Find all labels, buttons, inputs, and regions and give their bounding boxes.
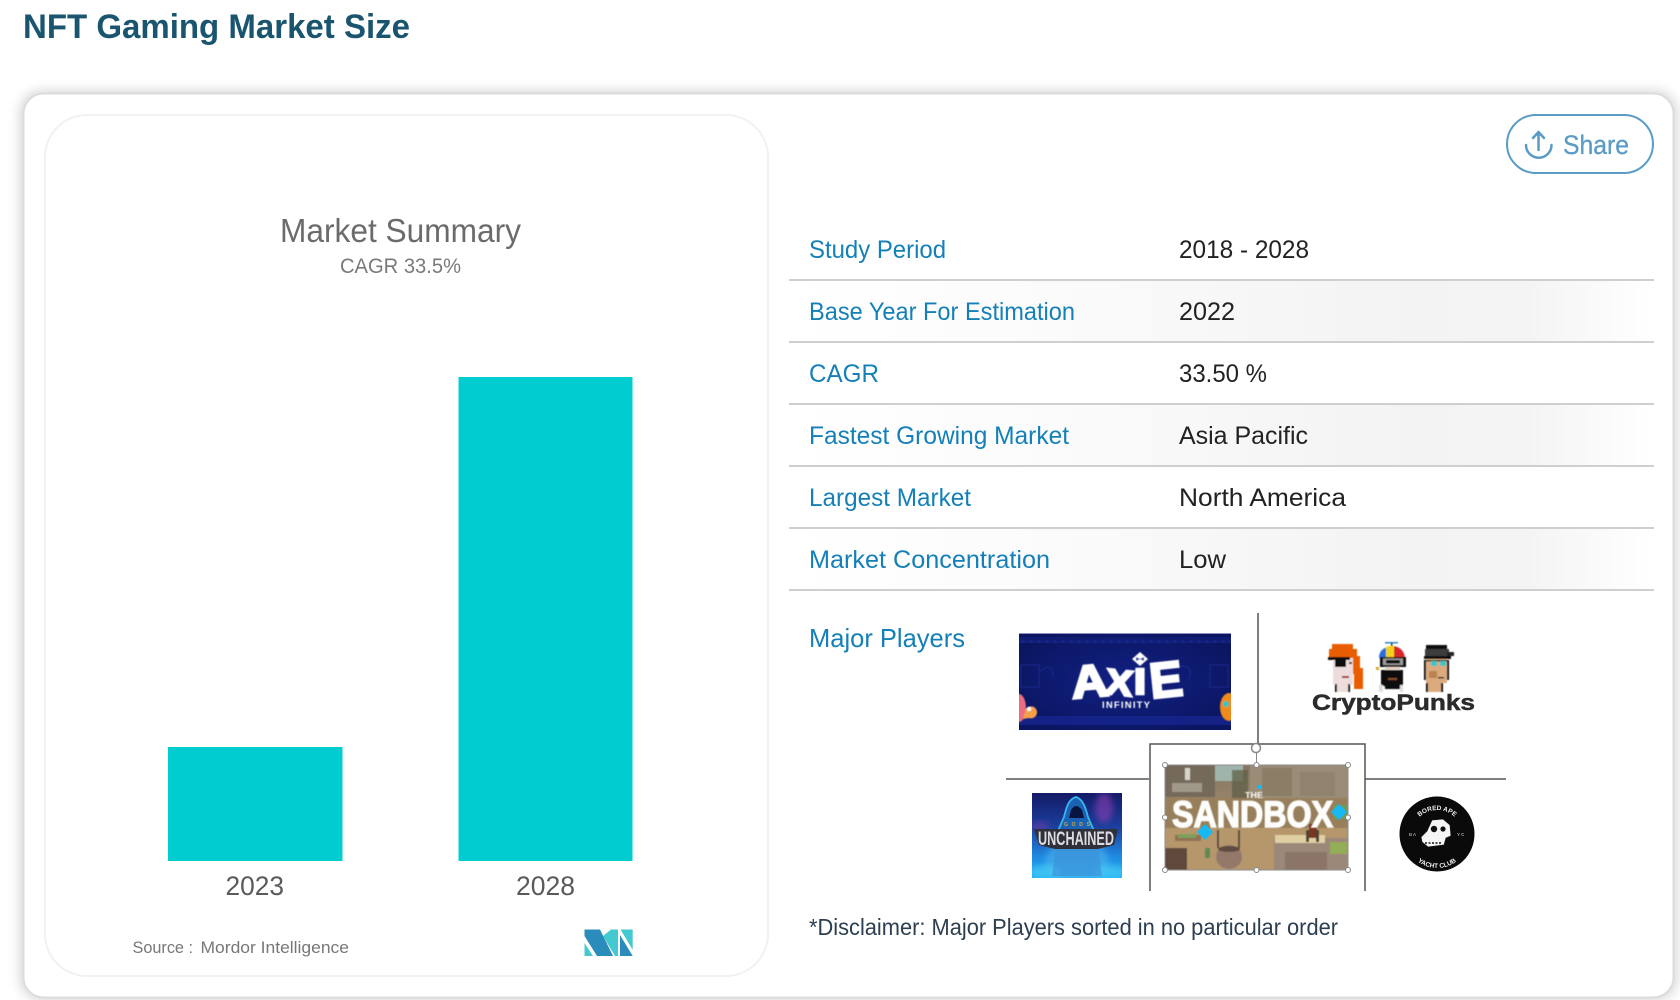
bar chart (168, 377, 632, 901)
row: CAGR (809, 360, 1267, 388)
text: sandbox wordmark: THE (1245, 790, 1263, 800)
row: market concentration: Market Concentration (809, 546, 1050, 574)
text: sandbox wordmark: SANDBOX (1172, 794, 1333, 835)
logo: the sandbox (1162, 744, 1350, 872)
label: share: Share (1563, 130, 1629, 160)
row: CAGR: CAGR (809, 360, 879, 388)
row: base year: 2022 (1179, 298, 1235, 326)
row: market concentration (809, 546, 1227, 574)
text: unchained wordmark: UNCHAINED (1038, 829, 1114, 850)
logo: gods unchained: GODS (1064, 822, 1091, 828)
punk: teal glasses (1424, 645, 1454, 692)
row: largest market: North America (1179, 484, 1346, 512)
logo: axie infinity (1012, 633, 1238, 730)
row: fastest growing market (809, 422, 1308, 450)
text: cryptopunks wordmark: CryptoPunks (1312, 690, 1475, 715)
heading: major players: Major Players (809, 623, 965, 653)
punk: orange hair (1328, 644, 1363, 692)
punk: propeller cap (1376, 642, 1406, 692)
label: 2023: 2023 (226, 871, 284, 901)
text: source: Source : (132, 938, 193, 957)
row: base year (809, 298, 1235, 326)
text: CAGR: CAGR 33.5% (340, 255, 461, 278)
row: study period (809, 236, 1309, 264)
bar: 2023 (168, 747, 342, 861)
major players grid (1006, 613, 1506, 891)
logo: bored ape yacht club: YACHT CLUB (1419, 858, 1456, 868)
row: largest market (809, 484, 1346, 512)
logo: bored ape yacht club (1400, 796, 1474, 872)
row: study period: Study Period (809, 236, 946, 264)
logo: bored ape yacht club: B A (1409, 832, 1416, 837)
bar: 2028 (458, 377, 632, 861)
row: market concentration: Low (1179, 546, 1227, 574)
icon: share arrow (1526, 132, 1552, 158)
logo: bored ape yacht club: BORED APE (1417, 806, 1458, 817)
text: source (132, 938, 349, 957)
icon: mordor logo (584, 930, 633, 956)
axie wordmark: X (1104, 661, 1135, 704)
logo: bored ape yacht club: Y C (1457, 832, 1465, 837)
row: CAGR: 33.50 % (1179, 360, 1267, 388)
row: fastest growing market: Asia Pacific (1179, 422, 1308, 450)
selection handles (1162, 744, 1350, 872)
panel: market summary (45, 115, 768, 976)
heading: market summary: Market Summary (280, 212, 521, 249)
logo: gods unchained (1032, 793, 1122, 878)
row: fastest growing market: Fastest Growing Market (809, 422, 1069, 450)
axie wordmark (1071, 659, 1184, 701)
button: share (1507, 115, 1653, 173)
title: NFT Gaming Market Size (23, 8, 410, 46)
logo: axie infinity: INFINITY (1102, 700, 1151, 711)
row: study period: 2018 - 2028 (1179, 236, 1309, 264)
text: disclaimer: *Disclaimer: Major Players sorted in no particular order (809, 914, 1338, 940)
table: market facts (789, 236, 1654, 591)
row: base year: Base Year For Estimation (809, 298, 1075, 326)
text: source: Mordor Intelligence (200, 938, 349, 957)
row: largest market: Largest Market (809, 484, 971, 512)
icon: ape skull (1421, 819, 1451, 847)
label: 2028: 2028 (516, 871, 575, 901)
axie wordmark: E (1147, 650, 1185, 709)
axie wordmark: I (1134, 661, 1146, 702)
axie wordmark: A (1069, 654, 1110, 709)
logo: cryptopunks (1312, 642, 1475, 715)
